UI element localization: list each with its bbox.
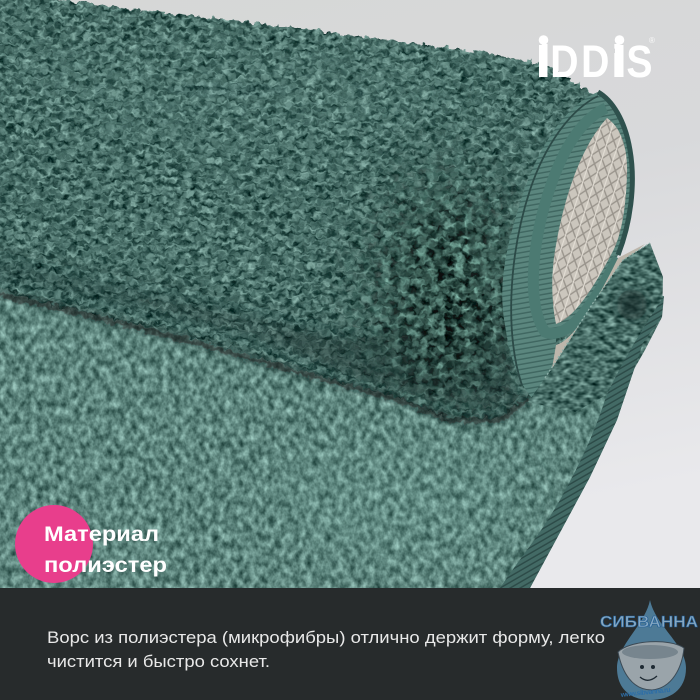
photo: dark crease under the roll (0, 290, 530, 420)
roll end: textured grey backing (552, 118, 627, 324)
watermark: website: www.sibvanna.ru (619, 687, 671, 699)
watermark: Sibvanna logo (600, 600, 698, 700)
badge text: material polyester: Материал (44, 523, 159, 546)
brand logo: IDDIS: iDDiS (539, 36, 653, 87)
footer description text: чистится и быстро сохнет. (47, 652, 270, 671)
badge text: material polyester: полиэстер (44, 554, 167, 577)
photo: roll end with bound edge and textured backing (502, 92, 633, 398)
photo: beige backing visible behind the flap (548, 244, 645, 392)
watermark: water drop (617, 600, 686, 700)
photo: folded flap of the mat (528, 243, 663, 412)
footer description text: Ворс из полиэстера (микрофибры) отлично держит форму, легко (47, 628, 605, 647)
roll end: inner binding (533, 108, 618, 333)
badge text: material polyester (44, 523, 167, 577)
photo: rolled bath mat (0, 0, 630, 428)
photo: glinting seam on the flap edge (545, 243, 650, 378)
badge: pink circle (15, 505, 93, 583)
photo: bound edge of lower mat (500, 296, 664, 588)
roll end: outer binding (502, 92, 633, 398)
watermark: brand name: СИБВАННА (600, 614, 698, 631)
shading on the roll (0, 40, 520, 410)
brand logo: IDDIS: ® (649, 36, 655, 45)
footer description text (47, 628, 605, 671)
watermark: bathtub (618, 642, 684, 690)
footer bar (0, 588, 700, 700)
photo: lower flat bath mat (0, 285, 700, 588)
roll: darker high-contrast tufts near the end (287, 100, 533, 420)
